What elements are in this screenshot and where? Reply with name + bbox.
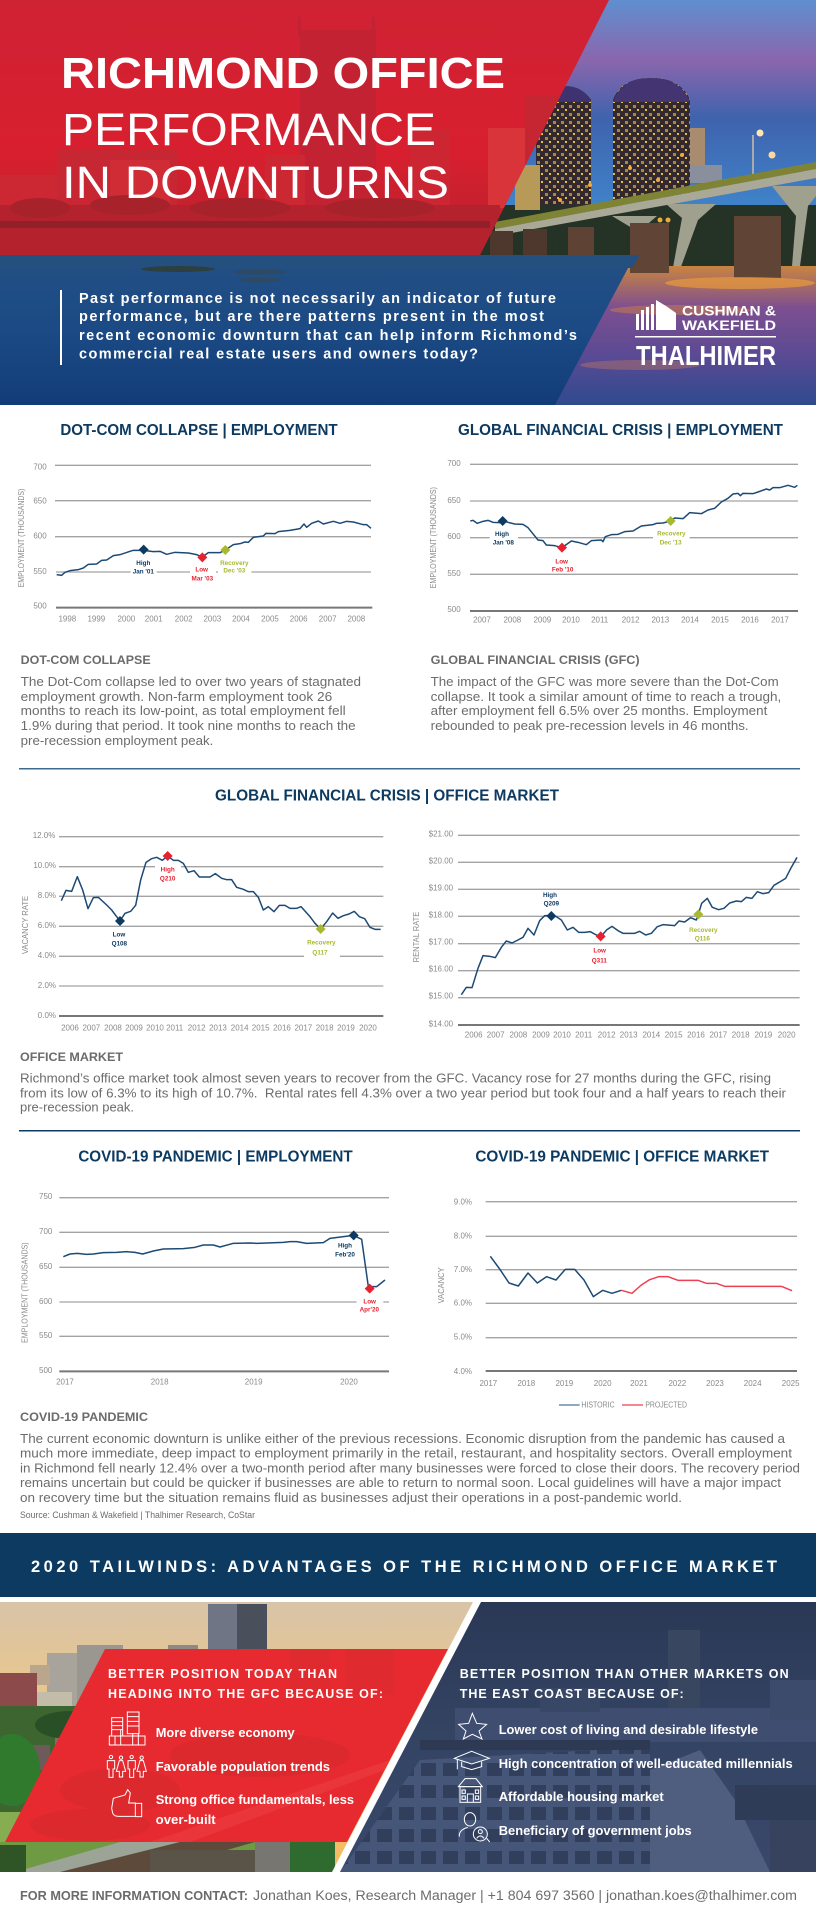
chart: rental rate 2006-2020: 2010 <box>553 1031 571 1040</box>
line chart: employment 1998-2008: 550 <box>33 567 47 576</box>
list item: population trends <box>107 1755 330 1777</box>
line chart: employment 2007-2017: 550 <box>447 569 461 578</box>
line chart: employment 2017-2020: 2020 <box>340 1378 358 1387</box>
text block: COVID-19 pandemic: The current economic downturn is unlike either of the previous recessions. Economic disruption from the pandemic has caused a <box>20 1431 786 1446</box>
logo: Cushman & Wakefield Thalhimer: WAKEFIELD <box>682 317 776 333</box>
chart: vacancy rate 2006-2020: 2008 <box>104 1024 122 1033</box>
hero photo: skyline, bridge and river at dusk <box>0 0 816 405</box>
chart: vacancy rate 2006-2020: 2006 <box>61 1024 79 1033</box>
heading: BETTER POSITION TODAY THAN <box>108 1667 337 1681</box>
text block <box>21 653 361 748</box>
photo: Richmond skyline at sunset <box>0 1602 490 1872</box>
line chart: employment 1998-2008: 2000 <box>117 615 136 624</box>
legend: HISTORIC <box>581 1401 615 1410</box>
chart: vacancy rate 2006-2020: 2015 <box>252 1024 270 1033</box>
text block: collapse. It took a similar amount of time to reach a trough, <box>431 689 781 704</box>
line chart: employment 2007-2017 <box>429 459 798 625</box>
chart: vacancy rate 2006-2020: 2017 <box>294 1024 313 1033</box>
text block: office market <box>20 1050 787 1115</box>
line chart: vacancy 2017-2025: 2025 <box>782 1379 800 1388</box>
line chart: employment 2007-2017: 600 <box>447 532 461 541</box>
heading: COVID-19 PANDEMIC | EMPLOYMENT <box>78 1149 353 1166</box>
line chart: employment 2017-2020: 700 <box>39 1227 53 1236</box>
title <box>61 49 505 208</box>
line chart: employment 2007-2017: 2011 <box>591 616 609 625</box>
line chart: vacancy 2017-2025: 2022 <box>668 1379 687 1388</box>
line chart: vacancy 2017-2025: VACANCY <box>437 1267 446 1303</box>
line chart: vacancy 2017-2025 <box>437 1198 800 1388</box>
line chart: vacancy 2017-2025: 7.0% <box>454 1265 472 1274</box>
line chart: employment 1998-2008: Recovery <box>220 560 249 567</box>
chart: rental rate 2006-2020: $20.00 <box>429 857 454 866</box>
line chart: employment 1998-2008: 2005 <box>261 615 279 624</box>
line chart: employment 2007-2017: EMPLOYMENT (THOUSANDS) <box>429 487 438 588</box>
chart: vacancy rate 2006-2020: Q108 <box>112 941 128 948</box>
text block: office market: Richmond’s office market took almost seven years to recover from the GFC. Vacancy rose for 27 months during the GFC, rising <box>20 1071 771 1086</box>
list item: millennials <box>454 1751 793 1771</box>
text block: employment growth. Non-farm employment took 26 <box>21 689 332 704</box>
text block: The impact of the GFC was more severe than the Dot-Com <box>431 674 779 689</box>
line chart: employment 1998-2008: 1999 <box>87 615 106 624</box>
line chart: employment 2007-2017: 2009 <box>533 616 552 625</box>
list item: housing: Affordable housing market <box>499 1789 664 1804</box>
line chart: employment 2007-2017: 500 <box>447 605 461 614</box>
chart: rental rate 2006-2020: 2011 <box>575 1031 593 1040</box>
chart: vacancy rate 2006-2020: 8.0% <box>38 891 56 900</box>
banner: 2020 tailwinds <box>0 1533 816 1597</box>
heading: DOT-COM COLLAPSE | EMPLOYMENT <box>60 422 338 439</box>
legend <box>559 1401 687 1410</box>
chart: rental rate 2006-2020: Q311 <box>592 957 607 964</box>
line chart: vacancy 2017-2025: 2017 <box>479 1379 498 1388</box>
intro statement: Past performance is not necessarily an indicator of future <box>79 291 556 307</box>
chart: rental rate 2006-2020: RENTAL RATE <box>412 912 421 962</box>
line chart: employment 1998-2008: High <box>136 560 150 567</box>
text block: office market: pre-recession peak. <box>20 1100 134 1115</box>
icon: star <box>459 1713 487 1739</box>
chart: rental rate 2006-2020: 2013 <box>620 1031 638 1040</box>
heading: HEADING INTO THE GFC BECAUSE OF: <box>108 1687 383 1701</box>
chart: vacancy rate 2006-2020: 2011 <box>166 1024 184 1033</box>
heading: BETTER POSITION THAN OTHER MARKETS ON <box>460 1667 789 1681</box>
icon: people group <box>107 1755 146 1777</box>
line chart: employment 2007-2017: Low <box>555 559 568 566</box>
line chart: employment 2017-2020: EMPLOYMENT (THOUSANDS) <box>20 1242 29 1343</box>
chart: rental rate 2006-2020: 2009 <box>532 1031 550 1040</box>
line chart: employment 2007-2017: 2010 <box>562 616 580 625</box>
chart: rental rate 2006-2020: Q116 <box>695 936 710 943</box>
legend: PROJECTED <box>645 1401 687 1410</box>
line chart: employment 2017-2020: Feb'20 <box>335 1251 355 1258</box>
list item: cost of living: Lower cost of living and desirable lifestyle <box>499 1722 758 1737</box>
text block: after employment fell 6.5% over 25 months. Employment <box>431 703 768 718</box>
chart: rental rate 2006-2020: 2020 <box>778 1031 796 1040</box>
chart: rental rate 2006-2020: 2006 <box>465 1031 483 1040</box>
line chart: employment 1998-2008 <box>17 463 372 624</box>
text block: The Dot-Com collapse led to over two years of stagnated <box>21 674 361 689</box>
red panel <box>5 1649 448 1842</box>
line chart: employment 2017-2020: 750 <box>39 1192 53 1201</box>
line chart: employment 1998-2008: 2008 <box>347 615 366 624</box>
heading: GFC office market: GLOBAL FINANCIAL CRISIS | OFFICE MARKET <box>215 788 559 804</box>
icon: person with magnifier <box>459 1813 490 1842</box>
text block: rebounded to peak pre-recession levels in 46 months. <box>431 718 749 733</box>
chart: rental rate 2006-2020: $19.00 <box>429 884 454 893</box>
chart: rental rate 2006-2020: $18.00 <box>429 911 454 920</box>
footer contact line: Jonathan Koes, Research Manager | +1 804 697 3560 | jonathan.koes@thalhimer.com <box>253 1888 797 1903</box>
chart: rental rate 2006-2020: 2017 <box>709 1031 728 1040</box>
text block: office market: from its low of 6.3% to its high of 10.7%. Rental rates fell 4.3% over a two year period but took four and a half years to reach their <box>20 1086 787 1101</box>
list item: population trends: Favorable population trends <box>156 1759 330 1774</box>
heading: GLOBAL FINANCIAL CRISIS | EMPLOYMENT <box>458 422 783 439</box>
text block: COVID-19 pandemic: COVID-19 PANDEMIC <box>20 1410 148 1424</box>
chart: rental rate 2006-2020: 2014 <box>642 1031 661 1040</box>
list item: office fundamentals <box>112 1790 354 1827</box>
chart: rental rate 2006-2020: $14.00 <box>429 1020 454 1029</box>
chart: vacancy rate 2006-2020: 2012 <box>188 1024 206 1033</box>
intro statement: recent economic downturn that can help inform Richmond’s <box>79 328 577 344</box>
chart: vacancy rate 2006-2020: Q117 <box>312 949 328 956</box>
title: RICHMOND OFFICE <box>61 49 505 98</box>
heading: COVID-19 PANDEMIC | OFFICE MARKET <box>475 1149 769 1166</box>
line chart: employment 2017-2020: 650 <box>39 1262 53 1271</box>
line chart: employment 2017-2020: High <box>338 1243 352 1250</box>
chart: rental rate 2006-2020: 2019 <box>754 1031 773 1040</box>
chart: vacancy rate 2006-2020: 2018 <box>316 1024 334 1033</box>
text block: COVID-19 pandemic: on recovery time but the situation remains fluid as businesses adjust their operations in a post-pandemic world. <box>20 1490 682 1505</box>
text block: office market: OFFICE MARKET <box>20 1050 124 1064</box>
chart: vacancy rate 2006-2020: 6.0% <box>38 921 56 930</box>
chart: vacancy rate 2006-2020: Recovery <box>307 940 336 947</box>
chart: rental rate 2006-2020: Q209 <box>544 901 560 908</box>
red overlay with skyline silhouette <box>0 0 609 255</box>
line chart: employment 2007-2017: 2016 <box>741 616 759 625</box>
heading <box>460 1667 789 1701</box>
line chart: employment 1998-2008: 2007 <box>319 615 337 624</box>
line chart: employment 2017-2020 <box>20 1192 389 1387</box>
chart: vacancy rate 2006-2020: 12.0% <box>33 831 55 840</box>
line chart: employment 2017-2020: 2018 <box>151 1378 169 1387</box>
list item: millennials: High concentration of well-educated millennials <box>499 1756 793 1771</box>
text block: COVID-19 pandemic: much more immediate, deep impact to employment primarily in the retail, restaurant, and hospitality sectors. Overall employment <box>20 1446 792 1460</box>
intro statement: performance, but are there patterns present in the most <box>79 309 544 325</box>
text block: COVID-19 pandemic: in Richmond fell nearly 12.4% over a two-month period after many businesses were forced to close their doors. The recovery period <box>20 1460 800 1475</box>
panel: dot-com employment <box>17 422 372 748</box>
photo: navy-toned streetscape <box>330 1602 816 1872</box>
logo: Cushman & Wakefield Thalhimer: CUSHMAN & <box>682 303 776 319</box>
list item: diverse economy <box>109 1712 295 1745</box>
text block: months to reach its low-point, as total employment fell <box>21 703 346 718</box>
icon: thumbs up <box>112 1790 142 1817</box>
intro statement <box>60 290 577 365</box>
line chart: employment 2007-2017: 2015 <box>711 616 729 625</box>
line chart: employment 1998-2008: Jan '01 <box>133 569 154 576</box>
line chart: employment 1998-2008: 1998 <box>58 615 77 624</box>
line chart: employment 2007-2017: 2008 <box>503 616 522 625</box>
chart: vacancy rate 2006-2020: 2009 <box>125 1024 143 1033</box>
list item: office fundamentals: over-built <box>156 1812 216 1827</box>
line chart: employment 1998-2008: Dec '03 <box>223 568 246 575</box>
line chart: vacancy 2017-2025: 2019 <box>555 1379 574 1388</box>
line chart: employment 1998-2008: Low <box>195 567 208 574</box>
chart: vacancy rate 2006-2020: 2.0% <box>38 981 56 990</box>
line chart: employment 1998-2008: 600 <box>33 532 47 541</box>
line chart: employment 2017-2020: Apr'20 <box>360 1307 380 1314</box>
line chart: employment 1998-2008: 2003 <box>203 615 222 624</box>
line chart: employment 2017-2020: 500 <box>39 1366 53 1375</box>
chart: vacancy rate 2006-2020: High <box>161 867 175 874</box>
line chart: vacancy 2017-2025: 8.0% <box>454 1232 472 1241</box>
line chart: employment 1998-2008: 650 <box>33 497 47 506</box>
panel: better position than other markets <box>330 1602 816 1872</box>
logo: Cushman & Wakefield Thalhimer <box>635 300 776 371</box>
title: PERFORMANCE <box>62 104 436 155</box>
white diagonal divider <box>332 1602 490 1872</box>
chart: rental rate 2006-2020: 2016 <box>687 1031 705 1040</box>
footer contact line <box>20 1888 797 1903</box>
chart: rental rate 2006-2020: 2008 <box>509 1031 528 1040</box>
chart: vacancy rate 2006-2020: 2016 <box>273 1024 291 1033</box>
chart: vacancy rate 2006-2020: 2014 <box>231 1024 249 1033</box>
chart: vacancy rate 2006-2020: 2013 <box>209 1024 227 1033</box>
icon: house <box>458 1779 482 1802</box>
line chart: vacancy 2017-2025: 2020 <box>594 1379 612 1388</box>
line chart: vacancy 2017-2025: 5.0% <box>454 1333 472 1342</box>
line chart: employment 2017-2020: 600 <box>39 1297 53 1306</box>
intro statement: commercial real estate users and owners today? <box>79 347 478 363</box>
line chart: employment 1998-2008: 2002 <box>175 615 193 624</box>
chart: vacancy rate 2006-2020: Low <box>113 932 125 939</box>
chart: vacancy rate 2006-2020: VACANCY RATE <box>21 896 30 954</box>
line chart: employment 2007-2017: Recovery <box>657 531 686 538</box>
text block: pre-recession employment peak. <box>21 733 213 748</box>
line chart: employment 1998-2008: 2001 <box>145 615 163 624</box>
line chart: employment 2007-2017: Feb '10 <box>552 567 574 574</box>
heading: THE EAST COAST BECAUSE OF: <box>460 1687 684 1701</box>
line chart: vacancy 2017-2025: 2018 <box>517 1379 536 1388</box>
line chart: employment 1998-2008: 700 <box>33 463 47 472</box>
line chart: vacancy 2017-2025: 9.0% <box>454 1198 472 1207</box>
banner: 2020 tailwinds: 2020 TAILWINDS: ADVANTAGES OF THE RICHMOND OFFICE MARKET <box>31 1558 777 1576</box>
list item: government jobs: Beneficiary of government jobs <box>499 1823 692 1838</box>
list item: office fundamentals: Strong office fundamentals, less <box>156 1792 354 1807</box>
logo: Cushman & Wakefield Thalhimer: THALHIMER <box>636 340 776 371</box>
chart: rental rate 2006-2020 <box>412 830 800 1040</box>
line chart: employment 2017-2020: Low <box>363 1299 376 1306</box>
line chart: employment 2007-2017: 2007 <box>473 616 491 625</box>
line chart: employment 2007-2017: Dec '13 <box>660 539 682 546</box>
blue river overlay <box>0 255 640 405</box>
line chart: employment 2007-2017: 2017 <box>771 616 789 625</box>
chart: rental rate 2006-2020: 2007 <box>487 1031 505 1040</box>
list item: housing <box>458 1779 664 1804</box>
chart: vacancy rate 2006-2020: 2019 <box>337 1024 355 1033</box>
text block: DOT-COM COLLAPSE <box>21 653 151 667</box>
hero banner <box>0 0 816 405</box>
footer contact line: FOR MORE INFORMATION CONTACT: <box>20 1888 248 1903</box>
chart: rental rate 2006-2020: 2012 <box>598 1031 616 1040</box>
chart: vacancy rate 2006-2020: 0.0% <box>38 1011 56 1020</box>
line chart: employment 2007-2017: 2014 <box>681 616 699 625</box>
list item: cost of living <box>459 1713 758 1739</box>
chart: rental rate 2006-2020: High <box>543 892 557 899</box>
chart: vacancy rate 2006-2020: 10.0% <box>33 861 56 870</box>
chart: vacancy rate 2006-2020: 4.0% <box>38 951 56 960</box>
text block: COVID-19 pandemic: Source: Cushman & Wakefield | Thalhimer Research, CoStar <box>20 1510 255 1520</box>
line chart: employment 2007-2017: High <box>495 531 509 538</box>
chart: vacancy rate 2006-2020 <box>21 831 383 1033</box>
title: IN DOWNTURNS <box>62 157 449 208</box>
chart: rental rate 2006-2020: $16.00 <box>429 965 454 974</box>
text block <box>431 653 781 733</box>
line chart: employment 1998-2008: 2006 <box>290 615 308 624</box>
text block: GLOBAL FINANCIAL CRISIS (GFC) <box>431 653 640 667</box>
line chart: employment 1998-2008: EMPLOYMENT (THOUSANDS) <box>17 488 26 587</box>
chart: rental rate 2006-2020: Low <box>593 948 606 955</box>
chart: rental rate 2006-2020: 2015 <box>665 1031 683 1040</box>
chart: vacancy rate 2006-2020: 2007 <box>82 1024 101 1033</box>
chart: rental rate 2006-2020: $17.00 <box>429 938 454 947</box>
panel: COVID employment <box>20 1149 389 1387</box>
line chart: vacancy 2017-2025: 6.0% <box>454 1299 472 1308</box>
chart: vacancy rate 2006-2020: Q210 <box>160 875 176 882</box>
line chart: vacancy 2017-2025: 2021 <box>630 1379 648 1388</box>
chart: rental rate 2006-2020: $15.00 <box>429 992 454 1001</box>
line chart: vacancy 2017-2025: 4.0% <box>454 1367 472 1376</box>
line chart: employment 2007-2017: 2013 <box>651 616 670 625</box>
panel: GFC employment <box>429 422 798 733</box>
panel: better position than GFC <box>0 1602 490 1872</box>
line chart: employment 2007-2017: 700 <box>447 459 461 468</box>
line chart: employment 2017-2020: 550 <box>39 1331 53 1340</box>
chart: vacancy rate 2006-2020: 2010 <box>146 1024 164 1033</box>
line chart: employment 2017-2020: 2019 <box>245 1378 263 1387</box>
chart: rental rate 2006-2020: 2018 <box>732 1031 750 1040</box>
icon: city buildings <box>109 1712 145 1745</box>
list item: diverse economy: More diverse economy <box>156 1725 295 1740</box>
line chart: employment 1998-2008: 2004 <box>232 615 250 624</box>
line chart: vacancy 2017-2025: 2023 <box>706 1379 724 1388</box>
chart: rental rate 2006-2020: Recovery <box>689 927 718 934</box>
text block: COVID-19 pandemic <box>20 1410 800 1520</box>
list item: government jobs <box>459 1813 692 1842</box>
chart: vacancy rate 2006-2020: 2020 <box>359 1024 377 1033</box>
panel: COVID office market <box>437 1149 800 1410</box>
line chart: employment 1998-2008: Mar '03 <box>192 576 214 583</box>
heading <box>108 1667 383 1701</box>
line chart: employment 2007-2017: 2012 <box>622 616 640 625</box>
line chart: employment 2007-2017: 650 <box>447 496 461 505</box>
text block: 1.9% during that period. It took nine months to reach the <box>21 718 356 733</box>
chart: rental rate 2006-2020: $21.00 <box>429 830 454 839</box>
line chart: employment 2017-2020: 2017 <box>56 1378 74 1387</box>
line chart: employment 2007-2017: Jan '08 <box>493 540 514 547</box>
text block: COVID-19 pandemic: remains uncertain but could be quicker if businesses are able to return to normal soon. Local guidelines will have a major impact <box>20 1475 781 1490</box>
icon: graduation cap <box>454 1751 489 1770</box>
line chart: vacancy 2017-2025: 2024 <box>744 1379 762 1388</box>
line chart: employment 1998-2008: 500 <box>33 602 47 611</box>
